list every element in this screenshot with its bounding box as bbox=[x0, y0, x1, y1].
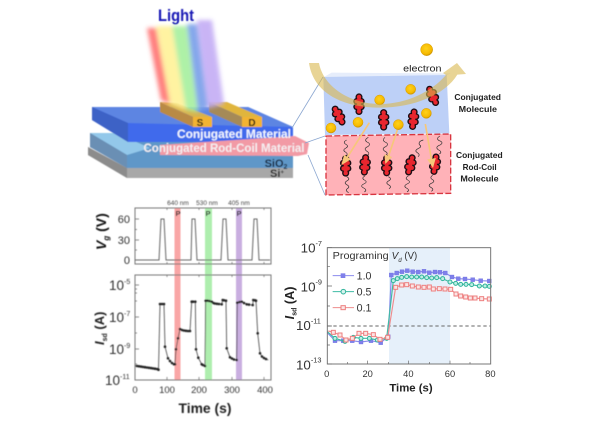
wavelength labels: 405 nm bbox=[228, 200, 250, 207]
connector lines bbox=[292, 77, 325, 195]
y axis title: sd bbox=[292, 308, 299, 316]
label: rod-coil molecule: Rod-Coil bbox=[463, 162, 497, 172]
label: SiO2: 2 bbox=[284, 164, 288, 171]
x tick labels: 80 bbox=[485, 369, 496, 379]
pink rod-coil band bbox=[160, 136, 309, 156]
wavelength labels: 530 nm bbox=[196, 200, 218, 207]
label: conjugated material: Conjugated Material bbox=[177, 129, 291, 141]
label: rod-coil molecule bbox=[456, 150, 503, 184]
Isd tick labels: 10 bbox=[109, 278, 124, 293]
light beam rainbow bbox=[147, 20, 224, 112]
shaded illumination window bbox=[389, 248, 450, 364]
y tick labels: 10 bbox=[301, 279, 315, 294]
Isd tick labels: -11 bbox=[120, 374, 130, 381]
molecules: conjugated bbox=[328, 84, 442, 131]
chart: gate voltage pulses bbox=[92, 200, 273, 416]
threshold dashed line bbox=[327, 324, 491, 327]
label: Si+: Si bbox=[270, 168, 280, 180]
label: SiO2: SiO bbox=[265, 158, 284, 170]
x tick labels: 60 bbox=[445, 369, 455, 379]
Isd axis title: sd bbox=[102, 333, 109, 341]
legend: 0.5 bbox=[357, 287, 372, 299]
Vg axis title: (V) bbox=[93, 213, 109, 236]
Isd tick labels: 10 bbox=[109, 310, 124, 325]
wavelength labels: 640 nm bbox=[167, 200, 189, 207]
x tick labels: 0 bbox=[132, 385, 138, 396]
y axis title: (A) bbox=[283, 287, 297, 308]
y axis title: I bbox=[283, 315, 297, 319]
Vg axis title: V bbox=[93, 239, 109, 250]
x tick labels: 200 bbox=[191, 385, 207, 396]
electrode: drain bbox=[209, 102, 262, 129]
x tick labels: 20 bbox=[362, 369, 373, 379]
label: Si+: + bbox=[280, 170, 284, 176]
y tick labels: -7 bbox=[315, 239, 322, 248]
Isd plot bbox=[135, 275, 271, 380]
legend: Programing bbox=[333, 251, 389, 262]
series 0.1 bbox=[328, 285, 489, 340]
x tick labels: 100 bbox=[159, 385, 175, 396]
Vg plot bbox=[135, 208, 271, 264]
light label: Light bbox=[158, 6, 194, 25]
alkyl coil chains bbox=[344, 136, 442, 193]
programming markers: P bbox=[175, 209, 181, 218]
y tick labels: -9 bbox=[315, 278, 322, 287]
wavelength bands bbox=[174, 208, 242, 380]
label: conjugated molecule bbox=[454, 92, 501, 114]
label: electron: electron bbox=[403, 63, 441, 73]
x axis title: Time (s) bbox=[178, 400, 232, 416]
label: rod-coil molecule: Conjugated bbox=[456, 150, 503, 160]
rod-coil layer box bbox=[326, 134, 451, 195]
electrode: source bbox=[160, 102, 212, 129]
Isd tick labels: 10 bbox=[105, 373, 120, 388]
Isd tick labels: -5 bbox=[124, 279, 130, 286]
label: rod-coil molecule: Molecule bbox=[460, 174, 499, 184]
Vg tick labels: 0 bbox=[124, 255, 130, 267]
curved electron arrow bbox=[309, 63, 466, 108]
molecules: rod-coil bbox=[340, 153, 442, 177]
molecule panel bbox=[309, 44, 503, 195]
layer: conjugated material bbox=[92, 107, 293, 142]
device schematic bbox=[88, 6, 309, 180]
x tick labels: 300 bbox=[224, 385, 240, 396]
Isd tick labels: -7 bbox=[124, 311, 130, 318]
programming markers: P bbox=[236, 209, 242, 218]
y tick labels: -11 bbox=[311, 316, 321, 325]
conjugated layer box bbox=[323, 73, 451, 135]
electrons bbox=[326, 44, 433, 133]
chart: programming Vd bbox=[283, 239, 496, 394]
series 1.0 bbox=[327, 271, 489, 343]
Isd axis title: I bbox=[92, 341, 107, 345]
Vg tick labels: 30 bbox=[118, 235, 130, 247]
y tick labels: 10 bbox=[301, 241, 315, 256]
y tick labels: 10 bbox=[296, 318, 311, 333]
electron transfer arrows bbox=[343, 123, 435, 166]
label: conjugated molecule: Conjugated bbox=[454, 92, 501, 102]
x tick labels: 0 bbox=[324, 369, 329, 379]
label: rod-coil material: Conjugated Rod-Coil Material bbox=[144, 143, 304, 155]
legend bbox=[333, 251, 417, 315]
legend: V bbox=[392, 251, 398, 262]
series 0.5 bbox=[327, 277, 489, 341]
Isd axis title: (A) bbox=[92, 312, 107, 333]
electrode: drain: D bbox=[248, 118, 256, 129]
layer: Si substrate bbox=[88, 147, 293, 178]
legend: 1.0 bbox=[357, 270, 372, 282]
layer: SiO2 bbox=[90, 133, 293, 168]
x tick labels: 400 bbox=[257, 385, 273, 396]
Isd tick labels bbox=[105, 278, 130, 388]
Vg axis title: g bbox=[102, 236, 111, 242]
Vg tick labels: 60 bbox=[118, 214, 130, 226]
Isd tick labels: -9 bbox=[124, 343, 130, 350]
x tick labels: 40 bbox=[403, 369, 414, 379]
y tick labels bbox=[296, 239, 322, 372]
legend: 0.1 bbox=[357, 303, 372, 315]
x axis title: Time (s) bbox=[389, 382, 433, 394]
legend: (V) bbox=[402, 251, 417, 262]
electrode: source: S bbox=[197, 118, 204, 129]
programming markers: P bbox=[205, 209, 211, 218]
label: conjugated molecule: Molecule bbox=[459, 104, 497, 114]
Isd tick labels: 10 bbox=[109, 342, 124, 357]
y tick labels: 10 bbox=[296, 357, 311, 372]
y tick labels: -13 bbox=[311, 356, 321, 365]
plot frame and ticks bbox=[327, 248, 491, 364]
legend: d bbox=[398, 258, 402, 264]
